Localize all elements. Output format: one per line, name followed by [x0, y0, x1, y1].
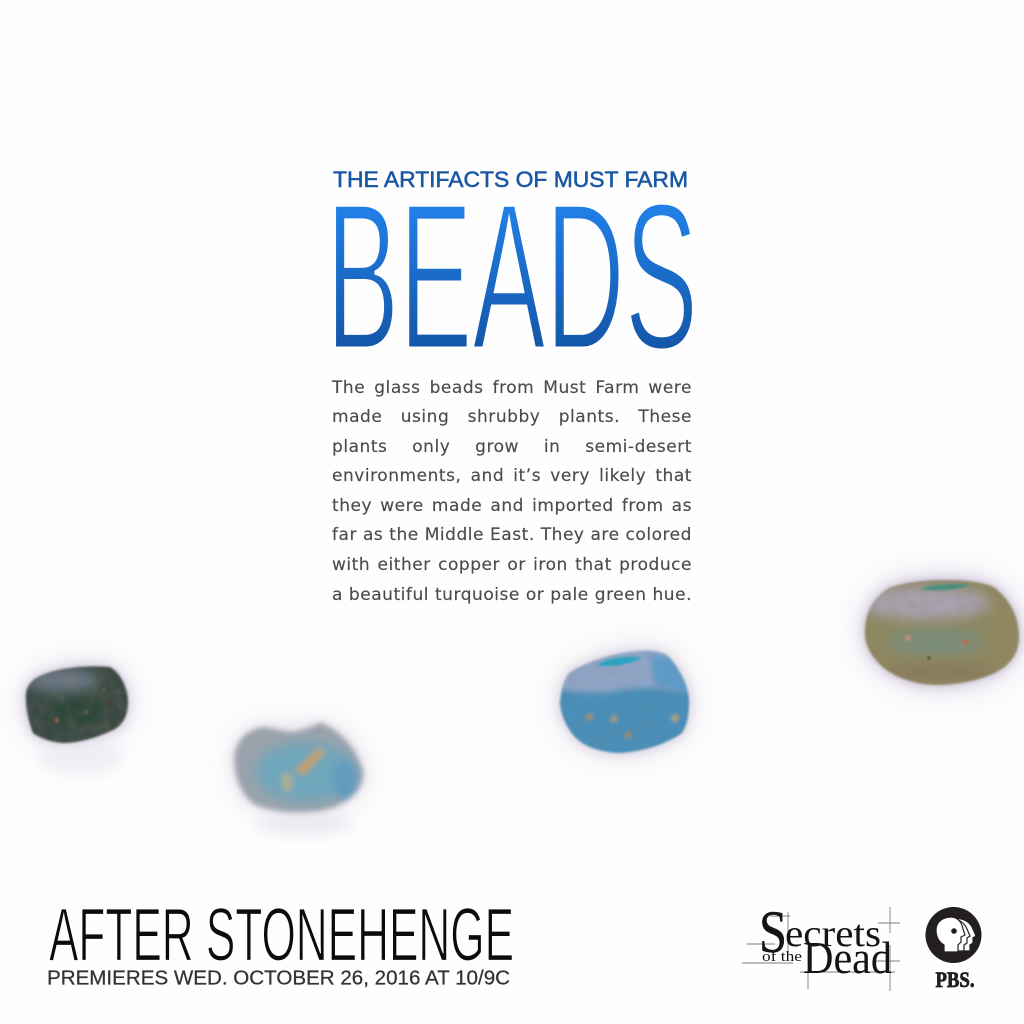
body text: plants only grow in semi-desert	[332, 437, 692, 457]
body text: a beautiful turquoise or pale green hue.	[332, 585, 692, 605]
body text: with either copper or iron that produce	[332, 555, 692, 575]
body text: environments, and it’s very likely that	[332, 466, 692, 486]
logo: secrets of the dead	[742, 899, 900, 991]
body text: they were made and imported from as	[332, 496, 692, 516]
bead: blurred blue kidney	[230, 720, 370, 835]
body text: far as the Middle East. They are colored	[332, 525, 692, 545]
logo: pbs	[926, 907, 982, 992]
body text	[332, 378, 692, 605]
logo: secrets of the dead: ecrets	[785, 913, 881, 955]
bead: olive green	[860, 575, 1024, 690]
logo: secrets of the dead: Dead	[803, 932, 892, 983]
bead: turquoise blue	[555, 645, 695, 755]
logo: secrets of the dead: S	[759, 899, 787, 965]
logo: secrets of the dead: of the	[762, 949, 802, 965]
logo: pbs: PBS.	[936, 967, 974, 992]
premiere date: PREMIERES WED. OCTOBER 26, 2016 AT 10/9C	[47, 968, 510, 990]
body text: The glass beads from Must Farm were	[332, 378, 692, 398]
title: beads: BEADS	[326, 160, 698, 394]
body text: made using shrubby plants. These	[332, 407, 692, 427]
show title: after stonehenge: AFTER STONEHENGE	[49, 892, 514, 976]
bead: dark green	[20, 660, 135, 776]
heading: the artifacts of must farm: THE ARTIFACTS OF MUST FARM	[333, 167, 688, 192]
